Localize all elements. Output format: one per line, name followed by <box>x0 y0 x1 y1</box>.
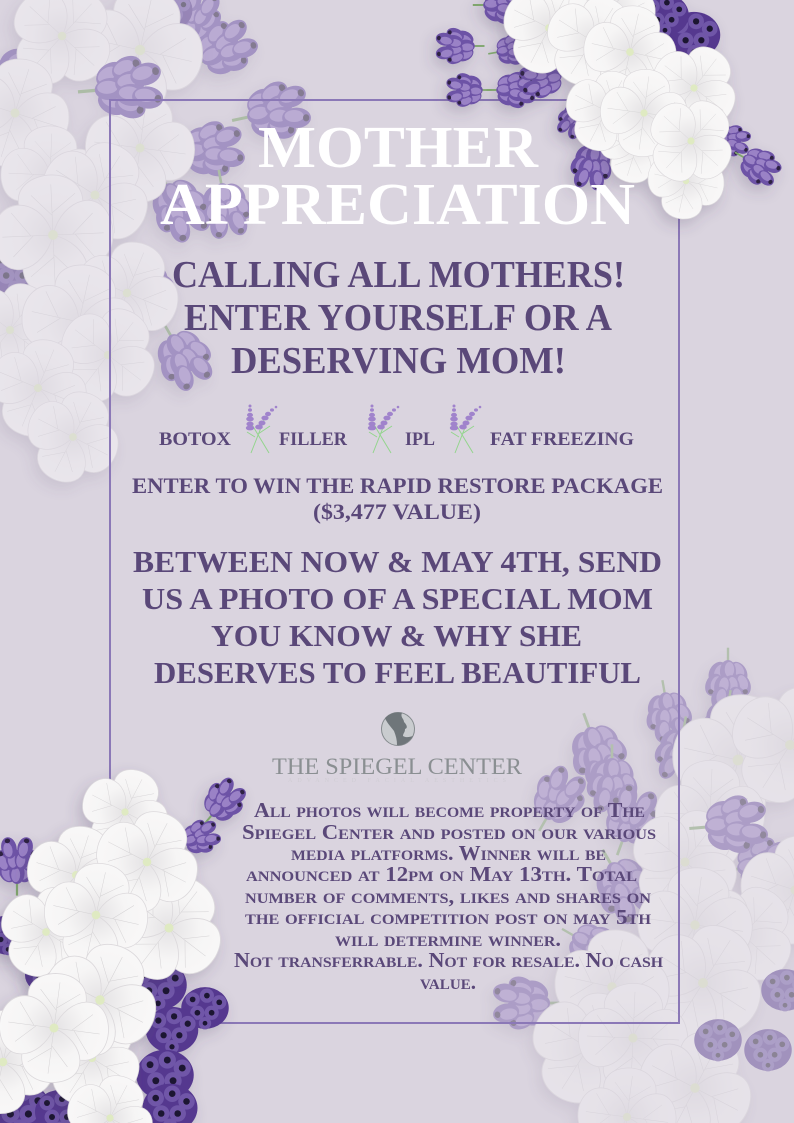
service labels: BOTOX <box>159 429 231 450</box>
entry instructions <box>133 544 662 690</box>
icon: lavender sprig <box>450 404 481 453</box>
service labels: IPL <box>405 429 435 450</box>
terms and conditions: All photos will become property of The <box>254 798 645 822</box>
entry instructions: BETWEEN NOW & MAY 4TH, SEND <box>133 544 662 579</box>
floral cluster: faded top left <box>0 0 317 500</box>
lavender sprigs behind blooms <box>0 0 317 401</box>
service labels: FILLER <box>279 429 347 450</box>
lavender sprigs <box>435 0 788 195</box>
logo: the spiegel center <box>272 712 523 784</box>
service labels <box>159 429 634 450</box>
entry instructions: US A PHOTO OF A SPECIAL MOM <box>142 581 653 616</box>
icon: lavender sprig <box>368 404 399 453</box>
entry instructions: YOU KNOW & WHY SHE <box>211 618 582 653</box>
entry instructions: DESERVES TO FEEL BEAUTIFUL <box>154 655 641 690</box>
terms and conditions: the official competition post on may 5th <box>245 905 651 929</box>
prize text: ENTER TO WIN THE RAPID RESTORE PACKAGE <box>132 473 663 498</box>
icon: face profiles globe <box>382 712 414 746</box>
terms and conditions <box>234 798 663 994</box>
prize text <box>132 473 663 524</box>
lavender sprigs behind blooms <box>491 648 794 1033</box>
prize text: ($3,477 VALUE) <box>313 499 481 524</box>
heading: calling all mothers: CALLING ALL MOTHERS! <box>172 254 625 296</box>
logo wordmark: THE SPIEGEL CENTER <box>272 754 523 779</box>
border frame <box>110 100 679 1023</box>
hydrangea blooms <box>486 0 755 228</box>
terms and conditions: number of comments, likes and shares on <box>245 884 651 908</box>
floral cluster: bottom left <box>0 752 255 1123</box>
terms and conditions: Spiegel Center and posted on our various <box>242 820 656 844</box>
lavender sprig over blooms <box>75 49 167 127</box>
heading: calling all mothers: ENTER YOURSELF OR A <box>184 297 613 339</box>
floral cluster: top right <box>435 0 788 228</box>
title: APPRECIATION <box>160 171 635 237</box>
hydrangea blooms <box>0 0 217 500</box>
lavender sprigs over blooms <box>686 789 794 1071</box>
terms and conditions: Not transferrable. Not for resale. No cash <box>234 948 663 972</box>
heading: calling all mothers: DESERVING MOM! <box>231 340 566 382</box>
logo tagline: ADVANCED FACIAL AESTHETICS <box>288 778 506 784</box>
title: MOTHER <box>258 114 539 180</box>
hydrangea blooms <box>0 752 246 1123</box>
hydrangea blooms <box>508 661 794 1123</box>
title <box>160 114 635 237</box>
floral cluster: faded bottom right <box>491 648 794 1123</box>
terms and conditions: media platforms. Winner will be <box>291 841 606 865</box>
heading: calling all mothers <box>172 254 625 382</box>
terms and conditions: value. <box>420 970 476 994</box>
service labels: FAT FREEZING <box>490 429 634 450</box>
services row <box>159 404 634 453</box>
terms and conditions: will determine winner. <box>335 927 561 951</box>
icon: lavender sprig <box>246 404 277 453</box>
terms and conditions: announced at 12pm on May 13th. Total <box>246 862 637 886</box>
lavender sprigs behind blooms <box>0 769 255 1123</box>
